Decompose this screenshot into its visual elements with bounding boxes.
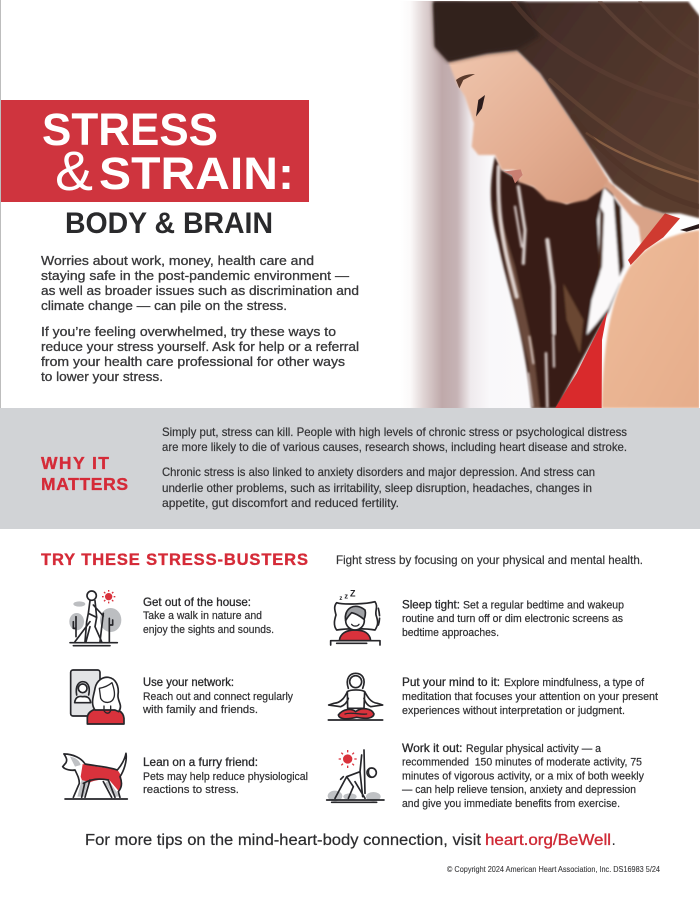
intro text: as well as broader issues such as discrimination and xyxy=(41,283,359,298)
tip: get out of the house: enjoy the sights and sounds. xyxy=(143,624,274,636)
icon: dog xyxy=(63,753,127,799)
photo: woman leaning against wall xyxy=(400,1,700,408)
heading: why it matters xyxy=(41,453,128,494)
lower hair xyxy=(491,157,639,408)
intro text: Worries about work, money, health care and xyxy=(41,253,314,268)
title banner: STRAIN: xyxy=(99,148,294,199)
icon: sleeping person xyxy=(331,589,380,645)
intro text: to lower your stress. xyxy=(41,369,163,384)
why it matters text: appetite, gut discomfort and reduced fertility. xyxy=(162,496,399,510)
tip: put your mind to it xyxy=(402,675,658,717)
tip: lean on a furry friend: Lean on a furry friend: xyxy=(143,755,258,769)
tip: work it out: — can help relieve tension, anxiety and depression xyxy=(402,784,636,796)
tip: work it out: minutes of vigorous activity, or a mix of both weekly xyxy=(402,770,644,782)
intro text: from your health care professional for other ways xyxy=(41,354,346,369)
tip: get out of the house xyxy=(143,595,274,636)
intro text: staying safe in the post-pandemic environment — xyxy=(41,268,349,283)
title banner xyxy=(1,100,309,202)
face xyxy=(448,50,608,204)
tip: use your network xyxy=(142,675,293,716)
icon: walker xyxy=(69,590,121,646)
icon: meditation xyxy=(328,673,383,720)
tip: work it out: and give you immediate benefits from exercise. xyxy=(402,798,620,810)
panel: why it matters xyxy=(0,408,700,529)
upper hair xyxy=(433,2,700,218)
tip: lean on a furry friend xyxy=(143,755,308,796)
intro text xyxy=(41,253,359,384)
tip: use your network: with family and friends. xyxy=(142,704,258,716)
intro text: climate change — can pile on the stress. xyxy=(41,298,287,313)
tip: work it out xyxy=(402,741,644,810)
tip: get out of the house: Take a walk in nature and xyxy=(143,610,262,622)
tip: sleep tight: bedtime approaches. xyxy=(402,627,499,639)
subtitle: BODY & BRAIN xyxy=(65,207,273,240)
neck xyxy=(604,177,668,248)
call to action: . xyxy=(612,832,616,849)
call to action xyxy=(85,832,616,849)
title banner: STRESS xyxy=(42,104,218,155)
red dress and strap xyxy=(555,312,607,408)
tip: work it out: Regular physical activity — a xyxy=(466,743,602,755)
icon: yoga with sun xyxy=(327,750,384,802)
heading: try these stress-busters: TRY THESE STRESS-BUSTERS xyxy=(41,551,308,569)
section intro: Fight stress by focusing on your physical and mental health. xyxy=(336,553,643,567)
eye and brow xyxy=(456,74,475,88)
tip: sleep tight xyxy=(402,598,624,639)
intro text: reduce your stress yourself. Ask for help or a referral xyxy=(41,339,359,354)
why it matters text xyxy=(162,425,627,510)
intro text: If you’re feeling overwhelmed, try these ways to xyxy=(41,324,336,339)
call to action: For more tips on the mind-heart-body connection, visit xyxy=(85,832,482,849)
heading: why it matters: WHY IT xyxy=(41,453,109,473)
why it matters text: are more likely to die of various causes, research shows, including heart disease and stroke. xyxy=(162,440,627,454)
tip: lean on a furry friend: Pets may help reduce physiological xyxy=(143,771,308,783)
shoulder xyxy=(602,230,700,408)
icon: sleeping person: Z xyxy=(350,589,356,599)
icon: sleeping person: z xyxy=(339,596,342,602)
icon: sleeping person: z xyxy=(344,591,348,600)
copyright: © Copyright 2024 American Heart Association, Inc. DS16983 5/24 xyxy=(447,865,660,874)
tip: sleep tight: Sleep tight: xyxy=(402,598,460,612)
why it matters text: Simply put, stress can kill. People with high levels of chronic stress or psychological distress xyxy=(162,425,627,439)
icon: network xyxy=(71,670,124,724)
why it matters text: Chronic stress is also linked to anxiety disorders and major depression. And stress can xyxy=(162,465,595,479)
tip: use your network: Use your network: xyxy=(143,675,234,689)
left page edge xyxy=(0,0,1,408)
tip: put your mind to it: Explore mindfulness, a type of xyxy=(504,677,645,689)
heading: why it matters: MATTERS xyxy=(41,474,128,494)
tip: use your network: Reach out and connect regularly xyxy=(143,691,293,703)
lips xyxy=(503,169,523,183)
tip: work it out: Work it out: xyxy=(402,741,462,755)
tip: put your mind to it: meditation that focuses your attention on your present xyxy=(402,691,658,703)
tip: sleep tight: routine and turn off or dim electronic screens as xyxy=(402,613,623,625)
title banner: & xyxy=(55,139,93,202)
call to action: heart.org/BeWell xyxy=(485,832,611,849)
tip: sleep tight: Set a regular bedtime and wakeup xyxy=(463,600,624,612)
tip: put your mind to it: experiences without interpretation or judgment. xyxy=(402,705,625,717)
tip: put your mind to it: Put your mind to it: xyxy=(402,675,500,689)
tip: get out of the house: Get out of the house: xyxy=(143,595,251,609)
why it matters text: underlie other problems, such as irritability, sleep disruption, headaches, changes in xyxy=(162,481,592,495)
tip: lean on a furry friend: reactions to stress. xyxy=(143,784,239,796)
tip: work it out: recommended 150 minutes of moderate activity, 75 xyxy=(402,756,642,768)
